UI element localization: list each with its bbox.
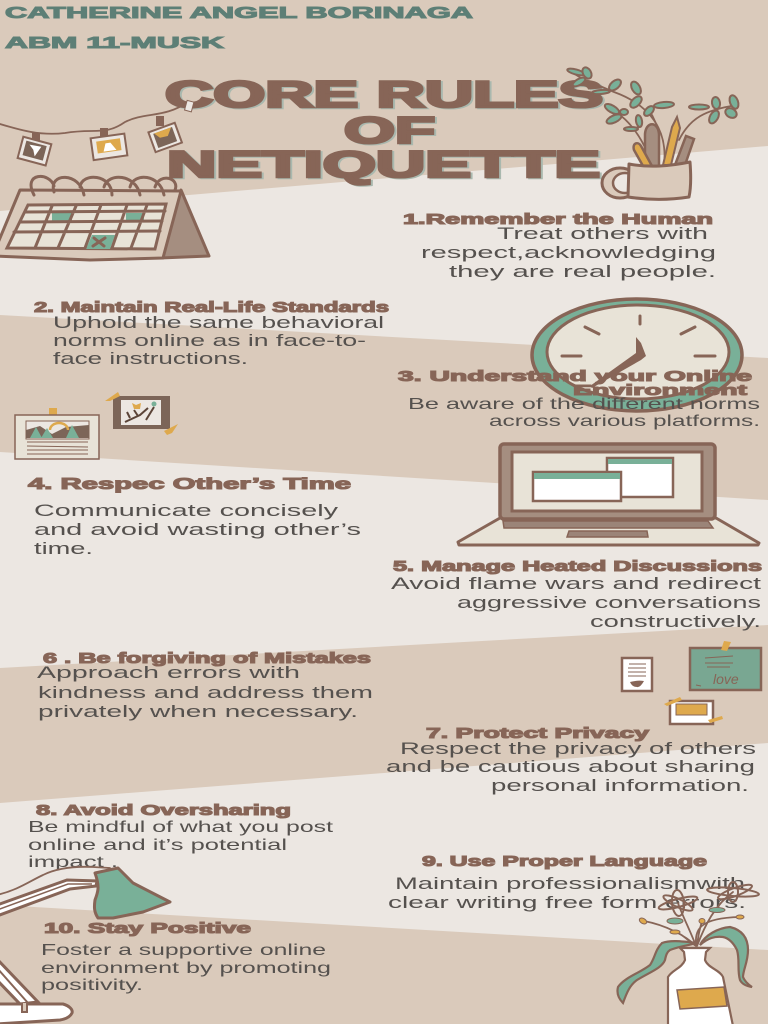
heading: rule 3: Environment — [573, 382, 747, 399]
body: rule 10 — [41, 942, 331, 994]
heading: rule 3 — [398, 368, 752, 399]
icon: hanging photos — [0, 100, 194, 166]
panel: rule 9 — [388, 853, 746, 912]
panel: rule 1 — [403, 211, 716, 281]
panel: rule 10 — [41, 920, 331, 994]
body: rule 1: respect,acknowledging — [421, 243, 716, 262]
icon: mug with pens and plant — [567, 66, 740, 199]
heading: rule 1: 1.Remember the Human — [403, 211, 713, 228]
body: rule 2: Uphold the same behavioral — [53, 313, 384, 332]
body: rule 5: Avoid flame wars and redirect — [391, 574, 761, 593]
heading: rule 6: 6 . Be forgiving of Mistakes — [43, 650, 371, 667]
body: rule 7: Respect the privacy of others — [400, 739, 756, 758]
icon: desk calendar — [0, 176, 209, 260]
body: rule 9 — [388, 874, 746, 912]
title: OF — [344, 110, 435, 151]
body: rule 7: personal information. — [491, 776, 749, 795]
body: rule 8: Be mindful of what you post — [28, 819, 334, 836]
title — [165, 74, 603, 185]
body: rule 2 — [53, 313, 384, 368]
body: rule 9: clear writing free form errors. — [388, 893, 746, 912]
body: rule 8: online and it’s potential — [28, 837, 287, 854]
body: rule 6: Approach errors with — [37, 663, 300, 682]
panel: rule 6 — [37, 650, 373, 721]
body: rule 6: privately when necessary. — [38, 702, 358, 721]
heading: rule 8: 8. Avoid Oversharing — [36, 802, 291, 819]
icon: notes and photo — [622, 641, 761, 724]
body: rule 7 — [386, 739, 756, 795]
heading: rule 9: 9. Use Proper Language — [422, 853, 707, 870]
heading: rule 4: 4. Respec Other’s Time — [28, 476, 351, 493]
heading: rule 5: 5. Manage Heated Discussions — [393, 558, 762, 575]
body: rule 10: positivity. — [41, 977, 143, 994]
panel: rule 8 — [28, 802, 334, 871]
body: rule 2: norms online as in face-to- — [53, 331, 366, 350]
body: rule 3: across various platforms. — [489, 413, 760, 430]
body: rule 3: Be aware of the different norms — [408, 396, 760, 413]
body: rule 1: Treat others with — [497, 224, 708, 243]
body: rule 4: time. — [34, 539, 93, 558]
body: rule 9: Maintain professionalismwith — [395, 874, 745, 893]
heading: rule 10: 10. Stay Positive — [44, 920, 251, 937]
heading: rule 7: 7. Protect Privacy — [426, 725, 650, 742]
panel: rule 2 — [34, 299, 389, 368]
body: rule 1: they are real people. — [449, 262, 716, 281]
body: rule 6 — [37, 663, 373, 721]
icon: wall pictures — [15, 392, 178, 459]
body: rule 5 — [391, 574, 761, 631]
icon: laptop — [458, 444, 759, 545]
body: rule 3 — [408, 396, 760, 430]
body: rule 1 — [421, 224, 716, 281]
heading: rule 2: 2. Maintain Real-Life Standards — [34, 299, 389, 316]
title: NETIQUETTE — [167, 144, 600, 185]
body: rule 10: Foster a supportive online — [41, 942, 326, 959]
body: rule 4: Communicate concisely — [34, 501, 339, 520]
body: rule 4: and avoid wasting other’s — [34, 520, 361, 539]
panel: rule 3 — [398, 368, 760, 430]
panel: rule 7 — [386, 725, 756, 795]
body: rule 8 — [28, 819, 334, 871]
title: CORE RULES — [165, 74, 603, 115]
body: rule 7: and be cautious about sharing — [386, 757, 755, 776]
body: rule 10: environment by promoting — [41, 960, 331, 977]
class section: ABM 11-MUSK — [5, 35, 225, 52]
icon: notes and photo: love — [713, 671, 739, 687]
author name: CATHERINE ANGEL BORINAGA — [5, 5, 474, 22]
panel: rule 5 — [391, 558, 762, 631]
body: rule 2: face instructions. — [53, 349, 248, 368]
icon: wall clock — [532, 299, 742, 411]
body: rule 5: aggressive conversations — [457, 593, 761, 612]
icon: desk lamp — [0, 867, 170, 1024]
heading: rule 3: 3. Understand your Online — [398, 368, 752, 385]
body: rule 8: impact . — [28, 854, 118, 871]
body: rule 5: constructively. — [590, 612, 761, 631]
icon: vase with flowers — [617, 882, 759, 1024]
panel: rule 4 — [28, 476, 361, 558]
body: rule 6: kindness and address them — [38, 683, 373, 702]
body: rule 4 — [34, 501, 361, 558]
